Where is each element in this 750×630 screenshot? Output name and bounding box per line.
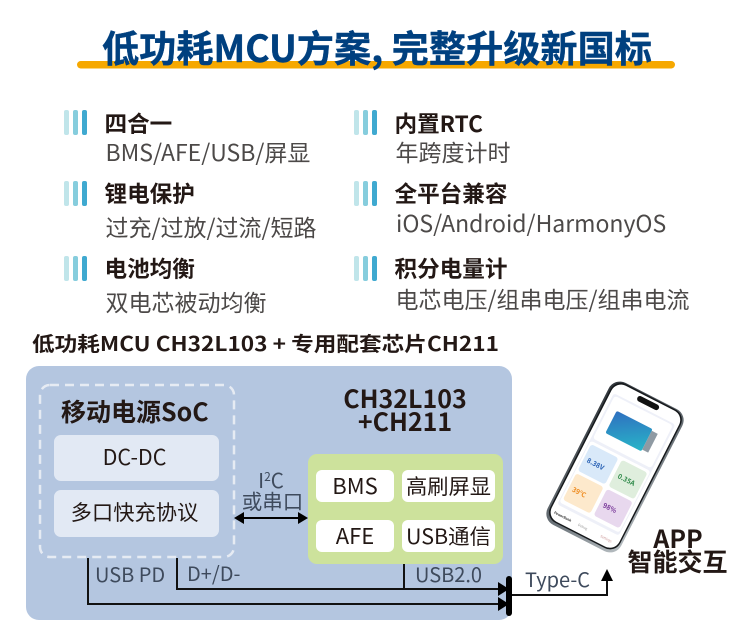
label: I2C or serial <box>242 464 303 515</box>
icon: phone app: 8.38V <box>585 455 607 473</box>
label: D+/D-: D+/D- <box>187 558 240 587</box>
label: I2C or serial: I <box>258 464 264 494</box>
label: Type-C: Type-C <box>525 564 590 593</box>
feature: 积分电量计 <box>354 251 690 315</box>
label: APP interaction <box>627 520 728 579</box>
box: USB comms: USB通信 <box>406 521 491 551</box>
icon: phone app <box>542 377 688 557</box>
icon: phone app: PowerBank <box>553 510 572 523</box>
feature: 四合一: 四合一 <box>104 106 172 139</box>
panel: chip block <box>26 366 512 620</box>
port bar <box>506 576 512 616</box>
feature: 全平台兼容: iOS/Android/HarmonyOS <box>396 205 666 239</box>
box: DC-DC: DC-DC <box>103 441 166 472</box>
feature: 四合一: BMS/AFE/USB/屏显 <box>106 134 310 168</box>
box: fast-charge protocols <box>54 490 219 537</box>
title underline <box>77 61 675 68</box>
feature: 全平台兼容: 全平台兼容 <box>394 176 507 209</box>
label: APP interaction: 智能交互 <box>627 543 728 579</box>
chip name: +CH211 <box>358 403 452 439</box>
feature: 积分电量计: 电芯电压/组串电压/组串电流 <box>396 281 690 315</box>
panel: chip functions <box>308 454 503 564</box>
label: USB2.0: USB2.0 <box>415 559 482 588</box>
icon: phone app: 0.35A <box>616 471 638 488</box>
feature: 积分电量计: 积分电量计 <box>394 251 507 284</box>
label: I2C or serial: C <box>271 464 284 494</box>
box: AFE: AFE <box>336 519 374 551</box>
icon: phone app: Settings <box>599 533 613 544</box>
box: fast-charge protocols: 多口快充协议 <box>71 496 198 527</box>
chip name <box>343 380 467 439</box>
label: I2C or serial: 2 <box>264 468 271 485</box>
label: I2C or serial: 或串口 <box>242 485 303 515</box>
feature: 内置RTC <box>354 106 510 168</box>
feature: 内置RTC: 内置RTC <box>394 106 483 139</box>
feature: 锂电保护: 过充/过放/过流/短路 <box>106 209 317 243</box>
feature: 内置RTC: 年跨度计时 <box>396 134 510 168</box>
chip name: CH32L103 <box>343 380 467 416</box>
box: DC-DC <box>54 435 219 481</box>
arrow: I2C bidirectional <box>234 512 308 524</box>
connector lines <box>88 558 500 604</box>
feature: 锂电保护: 锂电保护 <box>104 176 195 209</box>
feature: 电池均衡: 电池均衡 <box>104 251 195 284</box>
box: AFE <box>316 519 394 552</box>
box: BMS: BMS <box>332 469 378 501</box>
feature: 电池均衡 <box>64 251 266 318</box>
box: BMS <box>316 469 394 502</box>
panel: mobile power SoC <box>40 385 234 557</box>
label: USB PD: USB PD <box>95 559 165 588</box>
feature: 电池均衡: 双电芯被动均衡 <box>106 284 266 318</box>
label: APP interaction: APP <box>652 520 703 556</box>
feature: 锂电保护 <box>64 176 317 243</box>
feature: 全平台兼容 <box>354 176 666 239</box>
icon: phone app: Debug <box>577 522 589 531</box>
diagram heading: 低功耗MCU CH32L103 + 专用配套芯片CH211 <box>32 328 499 357</box>
icon: phone app: 98% <box>601 500 619 515</box>
icon: phone app: 39℃ <box>571 484 588 500</box>
box: high refresh display: 高刷屏显 <box>406 471 491 501</box>
arrow: Type-C to phone <box>512 569 613 595</box>
heading: 移动电源SoC: 移动电源SoC <box>61 393 209 429</box>
arrowheads into port <box>498 582 509 611</box>
feature: 四合一 <box>64 106 310 168</box>
title: 低功耗MCU方案, 完整升级新国标 <box>102 19 652 73</box>
